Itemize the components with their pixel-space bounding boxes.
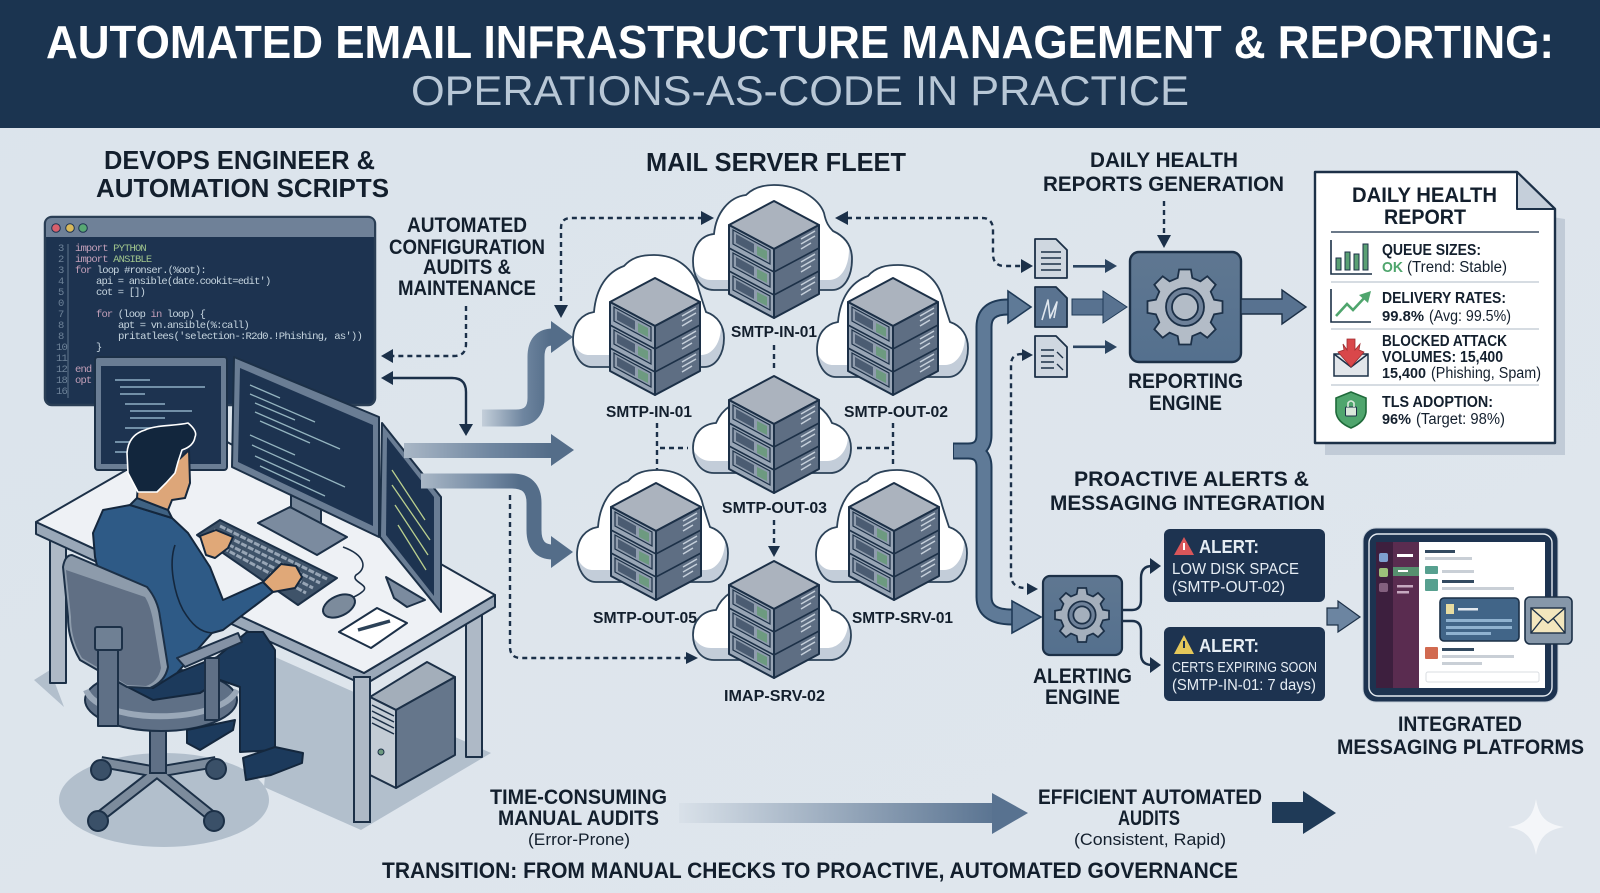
heading: proactive alerts: PROACTIVE ALERTS & [1074, 468, 1309, 491]
alert card: low disk space [1164, 529, 1325, 602]
label: automated configuration audits: AUDITS & [423, 256, 511, 279]
row: tls adoption: 96% [1382, 411, 1411, 428]
server: SMTP-OUT-02: SMTP-OUT-02 [844, 404, 948, 421]
label: automated configuration audits: CONFIGURATION [389, 236, 545, 259]
server: SMTP-IN-01 left [570, 243, 724, 421]
code listing [56, 243, 362, 398]
text: manual audits: (Error-Prone) [528, 830, 630, 849]
heading: devops engineer: DEVOPS ENGINEER & [104, 145, 375, 175]
code listing: for (loop in loop) { [96, 309, 206, 321]
code listing: 3 [58, 265, 64, 277]
row: queue sizes [1382, 242, 1507, 276]
arrow: engine to report [1241, 290, 1306, 324]
code listing: 3 [58, 243, 64, 255]
code listing: 4 [58, 276, 64, 288]
document: chart file [1035, 287, 1067, 327]
code listing: 2 [58, 254, 64, 266]
icon: envelope tile [1525, 597, 1572, 644]
near hand [263, 564, 302, 592]
report title [1352, 184, 1497, 229]
alert card: low disk space: (SMTP-OUT-02) [1172, 579, 1285, 596]
legs [120, 632, 303, 780]
label: alerting engine: ENGINE [1045, 686, 1120, 709]
code listing: 5 [58, 287, 64, 299]
icon: sparkle watermark [1508, 799, 1564, 855]
code listing: api = ansible(date.cookit=edit') [96, 276, 270, 288]
label: automated configuration audits: AUTOMATED [407, 214, 527, 237]
server: IMAP-SRV-02 [690, 561, 851, 705]
heading: devops engineer [96, 145, 389, 203]
label: integrated messaging platforms: MESSAGING PLATFORMS [1337, 736, 1584, 759]
title line 1: AUTOMATED EMAIL INFRASTRUCTURE MANAGEMENT & REPORTING: [46, 16, 1554, 68]
label: integrated messaging platforms: INTEGRATED [1398, 713, 1522, 736]
label: reporting engine: REPORTING [1128, 370, 1243, 393]
server: SMTP-SRV-01 [813, 458, 967, 627]
icon: input documents [1035, 239, 1067, 377]
code listing: 7 [58, 309, 64, 321]
mouse and cable [319, 547, 365, 622]
label: reporting engine: ENGINE [1149, 392, 1222, 415]
row: delivery rates [1382, 290, 1511, 325]
icon: blocked envelope [1334, 339, 1368, 376]
text: efficient audits: (Consistent, Rapid) [1074, 830, 1226, 849]
icon: tls shield [1336, 392, 1366, 428]
heading: daily health reports generation: DAILY HEALTH [1090, 149, 1238, 172]
row: delivery rates: DELIVERY RATES: [1382, 290, 1506, 307]
left monitor [95, 357, 227, 470]
icon: red warning [1174, 537, 1194, 555]
alert card: certs expiring: CERTS EXPIRING SOON [1172, 660, 1317, 676]
text: manual audits [490, 786, 667, 849]
server: SMTP-OUT-05: SMTP-OUT-05 [593, 610, 697, 627]
code listing: 16 [56, 386, 67, 398]
torso and arm [93, 498, 302, 688]
heading: proactive alerts: MESSAGING INTEGRATION [1050, 492, 1325, 515]
arrow: manual to automated [679, 793, 1028, 834]
arrow: solid two-way link [381, 371, 473, 436]
text: efficient audits: AUDITS [1118, 807, 1180, 830]
code listing: 10 [56, 342, 67, 354]
arrow: alerts to messaging [1327, 601, 1360, 632]
code listing: for loop #ronser.(%oot): [75, 265, 206, 277]
server: SMTP-OUT-03: SMTP-OUT-03 [722, 500, 827, 517]
code listing: 11 [56, 353, 67, 365]
alert card: certs expiring [1164, 627, 1325, 701]
server: SMTP-OUT-02 [814, 253, 968, 421]
heading: daily health reports generation: REPORTS GENERATION [1043, 173, 1284, 196]
text: manual audits: TIME-CONSUMING [490, 786, 667, 809]
code listing: 8 [58, 320, 64, 332]
arrows: documents into engine [1072, 259, 1127, 354]
arrow: dashed audit link to editor [381, 306, 466, 363]
document: data file [1035, 336, 1067, 377]
server: SMTP-OUT-03 [690, 376, 851, 517]
row: blocked attack volumes: (Phishing, Spam) [1431, 365, 1541, 382]
row: blocked attack volumes: 15,400 [1382, 365, 1426, 382]
label: automated configuration audits: MAINTENANCE [398, 277, 536, 300]
chair back and arms [63, 555, 242, 726]
row: queue sizes: OK [1382, 259, 1403, 276]
row: blocked attack volumes: VOLUMES: 15,400 [1382, 349, 1503, 366]
keyboard [197, 520, 337, 605]
code listing: apt = vn.ansible(%:call) [118, 320, 249, 332]
icon: yellow warning [1174, 635, 1194, 654]
conclusion line: TRANSITION: FROM MANUAL CHECKS TO PROACTIVE, AUTOMATED GOVERNANCE [382, 858, 1238, 883]
row: blocked attack volumes: BLOCKED ATTACK [1382, 333, 1507, 350]
channel messages [1425, 550, 1539, 682]
row: tls adoption: TLS ADOPTION: [1382, 394, 1493, 411]
alert card: certs expiring: (SMTP-IN-01: 7 days) [1172, 677, 1316, 694]
desk [36, 427, 495, 757]
server: SMTP-SRV-01: SMTP-SRV-01 [852, 610, 953, 627]
arrow: dotted into reporting engine [1157, 201, 1171, 248]
collar [130, 498, 172, 518]
heading: mail server fleet: MAIL SERVER FLEET [646, 147, 906, 177]
chair seat [85, 669, 237, 731]
right monitor [380, 423, 441, 612]
code listing: import PYTHON [75, 243, 146, 255]
arrows: alerts branching [1122, 558, 1161, 673]
head [127, 423, 196, 510]
pc tower [370, 662, 455, 788]
code listing: pritatlees('selection-:R2d0.!Phishing, as')) [118, 331, 362, 343]
text: efficient audits [1038, 786, 1262, 849]
code listing: 18 [56, 375, 67, 387]
report title: DAILY HEALTH [1352, 184, 1497, 207]
document: log file [1035, 239, 1067, 278]
row: tls adoption: (Target: 98%) [1416, 411, 1505, 428]
arrow: brace splitting to reporting and alerting [953, 291, 1041, 633]
center monitor [232, 357, 379, 555]
chat bubble [1440, 598, 1519, 641]
front desk leg [354, 677, 370, 822]
floor shadows [34, 657, 491, 847]
far hand [200, 530, 233, 558]
panel: reporting engine [1130, 252, 1241, 362]
row: queue sizes: QUEUE SIZES: [1382, 242, 1481, 259]
alert card: certs expiring: ALERT: [1199, 636, 1259, 656]
illustration: engineer at desk [34, 357, 495, 847]
icon: delivery line chart [1331, 289, 1371, 322]
arrow: dark forward [1272, 791, 1336, 834]
sidebar icons [1379, 553, 1419, 594]
icon: queue bar chart [1331, 240, 1372, 274]
dashed connectors around fleet [510, 218, 1026, 658]
panel: daily health report document [1315, 172, 1565, 455]
row: blocked attack volumes [1382, 333, 1541, 382]
row: delivery rates: (Avg: 99.5%) [1429, 308, 1511, 325]
code listing: 8 [58, 331, 64, 343]
arrow: upper flow to fleet [482, 321, 573, 418]
label: reporting engine [1128, 370, 1243, 415]
alert card: low disk space: ALERT: [1199, 537, 1259, 557]
panel: code editor window [45, 217, 375, 405]
row: delivery rates: 99.8% [1382, 308, 1424, 325]
code listing: 0 [58, 298, 64, 310]
icon: gear [1055, 588, 1109, 642]
icon: gear [1148, 270, 1222, 344]
connector arrowheads [554, 211, 1038, 664]
report title: REPORT [1384, 206, 1466, 229]
label: alerting engine: ALERTING [1033, 665, 1132, 688]
text: manual audits: MANUAL AUDITS [498, 807, 659, 830]
panel: alerting engine [1043, 576, 1122, 655]
arrow: lower flow to fleet [421, 481, 573, 568]
notepad and pen [339, 608, 407, 648]
chair base [88, 728, 226, 831]
alert card: low disk space: LOW DISK SPACE [1172, 561, 1299, 578]
row: queue sizes: (Trend: Stable) [1407, 259, 1507, 276]
text: efficient audits: EFFICIENT AUTOMATED [1038, 786, 1262, 809]
label: automated configuration audits [389, 214, 545, 300]
arrow: middle flow to fleet [404, 434, 574, 466]
server: SMTP-IN-01 top [690, 175, 852, 341]
label: integrated messaging platforms [1337, 713, 1584, 759]
row: tls adoption [1382, 394, 1505, 428]
code listing: cot = []) [96, 287, 145, 299]
code listing: end [75, 364, 92, 376]
heading: daily health reports generation [1043, 149, 1284, 196]
code listing: opt [75, 375, 92, 387]
heading: proactive alerts [1050, 468, 1325, 515]
code listing: import ANSIBLE [75, 254, 152, 266]
header banner [0, 0, 1600, 128]
code listing: 12 [56, 364, 67, 376]
server: SMTP-OUT-05 [574, 458, 728, 627]
title line 2: OPERATIONS-AS-CODE IN PRACTICE [411, 67, 1189, 114]
server: SMTP-IN-01 top: SMTP-IN-01 [731, 324, 817, 341]
server: SMTP-IN-01 left: SMTP-IN-01 [606, 404, 692, 421]
code listing: } [96, 342, 102, 354]
illustration: messaging tablet [1363, 528, 1572, 702]
label: alerting engine [1033, 665, 1132, 709]
heading: devops engineer: AUTOMATION SCRIPTS [96, 173, 389, 203]
server: IMAP-SRV-02: IMAP-SRV-02 [724, 688, 825, 705]
